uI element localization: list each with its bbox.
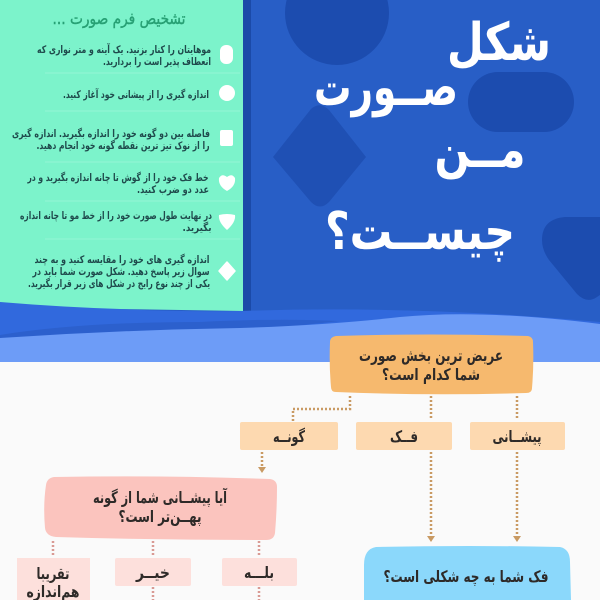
question: forehead wider than cheeks: [44, 476, 277, 540]
arrowheads: [258, 467, 521, 542]
icon: round face: [219, 85, 235, 101]
title: مــن: [434, 120, 526, 180]
step 4: [27, 171, 235, 196]
wave: mid blue: [0, 302, 600, 370]
wave: light blue: [0, 314, 600, 365]
decorative shape: shield: [542, 217, 600, 300]
header background: [0, 0, 600, 340]
step 5 text: در نهایت طول صورت خود را از خط مو تا چانه اندازه: [20, 210, 212, 222]
step 1 text: [37, 43, 211, 68]
icon: oblong face: [220, 45, 233, 64]
answer: yes: بلـــه: [244, 563, 274, 582]
dark stripe beside panel: [243, 0, 251, 311]
page background: [0, 362, 600, 600]
answer: yes: [222, 558, 297, 586]
step 6 text: اندازه گیری های خود را مقایسه کنید و به چند: [34, 253, 210, 266]
icon: triangle face: [219, 214, 235, 230]
step 3: [12, 127, 233, 152]
icon: heart face: [219, 175, 235, 191]
step 5 text: بگیرید.: [182, 221, 212, 234]
step 6 text: [28, 253, 210, 290]
step 6 text: سوال زیر پاسخ دهید. شکل صورت شما باید در: [32, 266, 210, 278]
answer: about equal: [17, 558, 90, 600]
option: forehead: [470, 422, 565, 450]
question: forehead wider than cheeks: آیا پیشــانی شما از گونه: [93, 487, 227, 508]
step 2 text: اندازه گیری را از پیشانی خود آغاز کنید.: [63, 88, 209, 101]
panel heading: تشخیص فرم صورت ...: [52, 9, 186, 29]
title: شکل: [447, 13, 551, 73]
step 4 text: عدد دو ضرب کنید.: [137, 184, 209, 196]
decorative shape: diamond: [273, 105, 366, 206]
title: [314, 13, 551, 262]
icon: diamond face: [219, 262, 235, 280]
step 3 text: [12, 127, 210, 152]
option: cheek: گونــه: [273, 427, 305, 446]
decorative shape: circle: [285, 0, 389, 65]
flowchart connectors: [262, 396, 517, 535]
step 3 text: فاصله بین دو گونه خود را اندازه بگیرید. اندازه گیری: [12, 127, 210, 140]
step 5: [20, 210, 235, 234]
step 4 text: [27, 171, 209, 196]
step 4 text: خط فک خود را از گوش تا چانه اندازه بگیرید و در: [27, 171, 209, 184]
question: forehead wider than cheeks: پهــن‌تر است؟: [118, 507, 202, 527]
step 1 text: موهایتان را کنار بزنید. یک آینه و متر نواری که: [37, 43, 211, 56]
title: چیســت؟: [325, 202, 515, 262]
question: jaw shape: فک شما به چه شکلی است؟: [384, 567, 548, 587]
question: jaw shape: [364, 546, 571, 600]
option: forehead: پیشــانی: [492, 427, 542, 447]
icon: square face: [220, 130, 233, 146]
decorative shape: pill: [468, 72, 574, 132]
option: jaw: [356, 422, 452, 450]
title: صــورت: [314, 58, 458, 118]
option: jaw: فــک: [390, 427, 418, 446]
answer: about equal: تقریبا: [36, 564, 70, 583]
option: cheek: [240, 422, 338, 450]
question: widest part of face: [330, 334, 533, 394]
panel: face measurement steps: [0, 0, 243, 311]
answer: no: [115, 558, 191, 586]
wave: deeper band: [0, 320, 340, 345]
question: widest part of face: شما کدام است؟: [382, 365, 480, 384]
answer: no: خیــر: [135, 563, 170, 582]
step 6 text: یکی از چند نوع رایج در شکل های زیر قرار بگیرید.: [28, 277, 210, 290]
step 5 text: [20, 210, 212, 234]
pink connectors: [53, 541, 259, 600]
step 2: [63, 85, 235, 101]
step 1: [37, 43, 233, 68]
step 3 text: را از نوک تیز ترین نقطه گونه خود انجام دهید.: [36, 139, 210, 152]
step 1 text: انعطاف پذیر است را بردارید.: [103, 56, 211, 68]
question: widest part of face: عریض ترین بخش صورت: [359, 346, 503, 365]
step 6: [28, 253, 235, 290]
